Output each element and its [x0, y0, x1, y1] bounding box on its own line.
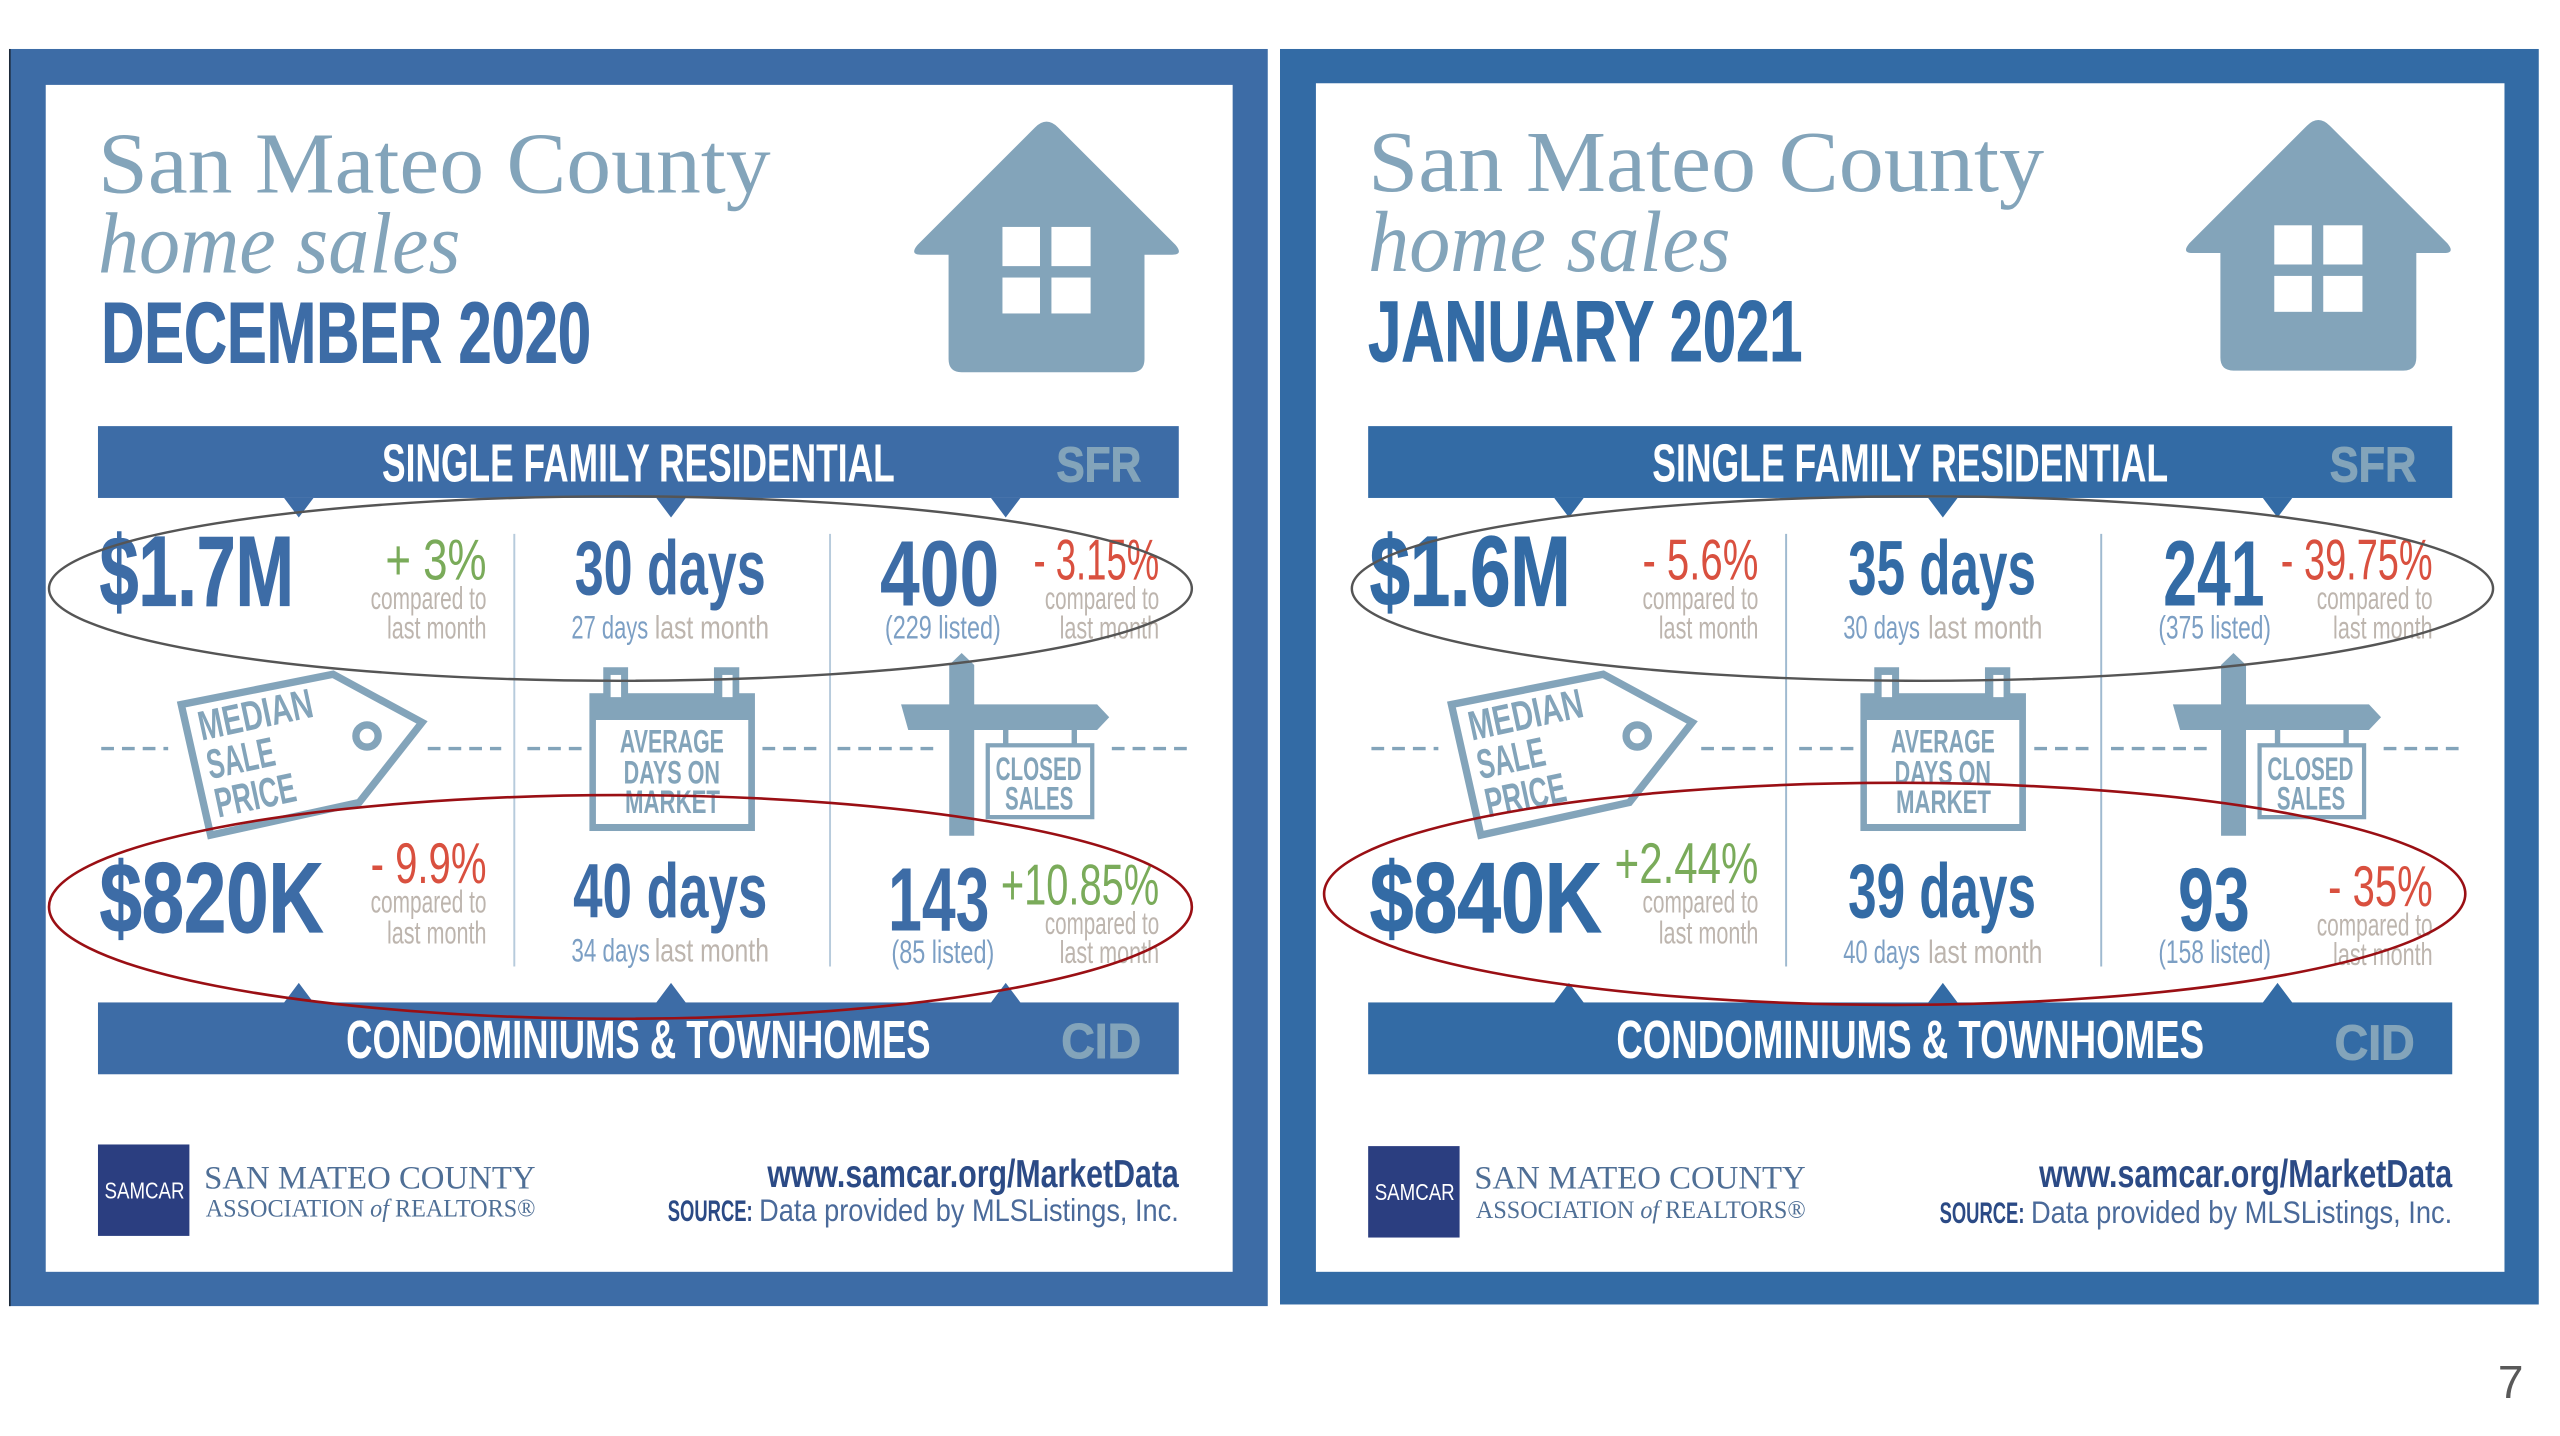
SFR median price: $1.6M — [1370, 517, 1571, 628]
icon: calendar — [589, 667, 755, 831]
SFR closed sales: (229 listed) — [885, 608, 1001, 645]
source and website: www.samcar.org/MarketData — [2038, 1153, 2453, 1196]
CID median price: $820K — [100, 843, 323, 954]
icon: price tag: SALE — [1472, 728, 1549, 788]
banner: single family residential: SINGLE FAMILY RESIDENTIAL — [382, 434, 895, 494]
icon: calendar: AVERAGE — [620, 723, 724, 760]
ellipse highlight: CID row — [1324, 783, 2465, 1005]
SFR median price: last month — [1659, 610, 1758, 645]
SAMCAR logo — [1368, 1146, 1806, 1238]
SFR days on market: last month — [1928, 608, 2042, 645]
inner white card — [1316, 83, 2504, 1272]
panel: December 2020 — [9, 49, 1268, 1306]
SFR median price: + 3% — [385, 529, 487, 593]
CID median price: +2.44% — [1615, 832, 1758, 896]
ellipse highlight: CID row — [49, 795, 1192, 1019]
inner white card — [46, 85, 1233, 1272]
CID days on market: last month — [1928, 933, 2042, 970]
icon: calendar: AVERAGE — [1891, 723, 1995, 760]
SFR closed sales: compared to — [2317, 581, 2433, 616]
title: San Mateo County — [98, 116, 771, 212]
title — [98, 116, 771, 381]
icon: price tag: PRICE — [1481, 763, 1570, 826]
CID median price: last month — [1659, 916, 1758, 951]
icon: for sale sign — [2173, 653, 2381, 836]
banner: condominiums and townhomes: CID — [2335, 1017, 2415, 1071]
outer blue frame — [9, 49, 1268, 1306]
title: DECEMBER 2020 — [101, 285, 591, 381]
SFR days on market: 35 days — [1848, 526, 2036, 611]
SFR days on market: 30 days — [575, 526, 766, 611]
CID closed sales: - 35% — [2328, 855, 2433, 919]
icon: for sale sign: SALES — [1005, 779, 1073, 816]
page number: 7 — [2498, 1356, 2524, 1408]
SFR closed sales: 400 — [880, 522, 999, 626]
SFR closed sales: 241 — [2163, 522, 2264, 626]
SFR closed sales: - 39.75% — [2281, 529, 2433, 593]
SAMCAR logo: SAMCAR — [105, 1177, 185, 1203]
SFR median price: last month — [387, 610, 487, 645]
banner: condominiums and townhomes — [1368, 983, 2452, 1074]
icon: calendar: DAYS ON — [1895, 753, 1991, 790]
title: home sales — [1368, 194, 1731, 290]
CID days on market: 39 days — [1848, 850, 2036, 935]
CID closed sales: compared to — [1045, 906, 1159, 941]
CID closed sales — [2158, 851, 2433, 972]
SFR days on market: 27 days — [571, 608, 648, 645]
CID closed sales: 143 — [888, 851, 989, 951]
panel: January 2021 — [1280, 49, 2539, 1304]
CID median price — [1370, 832, 1758, 954]
CID closed sales: +10.85% — [1001, 853, 1159, 917]
icon: price tag: MEDIAN — [1464, 679, 1587, 749]
banner: single family residential: SINGLE FAMILY RESIDENTIAL — [1652, 434, 2168, 494]
CID median price — [100, 832, 487, 954]
CID median price: last month — [387, 916, 487, 951]
source and website: SOURCE: — [668, 1195, 753, 1228]
CID days on market: 40 days — [1843, 933, 1920, 970]
banner: single family residential: SFR — [2330, 439, 2416, 493]
CID median price: $840K — [1370, 843, 1602, 954]
SFR median price: compared to — [1642, 581, 1758, 616]
title: home sales — [98, 196, 460, 292]
icon: calendar: DAYS ON — [624, 753, 720, 790]
icon: price tag: PRICE — [210, 763, 300, 826]
SAMCAR logo: SAN MATEO COUNTY — [204, 1161, 536, 1197]
CID closed sales: last month — [1060, 935, 1159, 970]
title: San Mateo County — [1368, 114, 2044, 210]
SFR closed sales: - 3.15% — [1033, 529, 1159, 593]
banner: condominiums and townhomes: CID — [1061, 1015, 1141, 1069]
CID median price: compared to — [371, 885, 487, 920]
banner: condominiums and townhomes — [98, 983, 1179, 1074]
icon: for sale sign: CLOSED — [996, 750, 1082, 787]
CID days on market: 34 days — [571, 932, 650, 969]
CID days on market — [571, 850, 769, 969]
icon: for sale sign — [901, 653, 1109, 836]
source and website: Data provided by MLSListings, Inc. — [2031, 1195, 2452, 1230]
SFR median price — [1370, 517, 1758, 645]
icon: calendar: MARKET — [625, 783, 720, 820]
icon: price tag — [1451, 674, 1692, 835]
SFR median price: compared to — [371, 581, 487, 616]
SFR closed sales: last month — [1060, 610, 1159, 645]
CID closed sales: compared to — [2317, 907, 2433, 942]
ellipse highlight: SFR row — [1352, 496, 2493, 681]
SFR days on market: 30 days — [1843, 608, 1920, 645]
banner: condominiums and townhomes: CONDOMINIUMS & TOWNHOMES — [1616, 1010, 2204, 1070]
source and website: SOURCE: — [1940, 1197, 2024, 1230]
banner: single family residential — [1368, 426, 2452, 518]
SFR median price — [100, 517, 487, 645]
source and website: www.samcar.org/MarketData — [767, 1153, 1180, 1196]
title — [1368, 114, 2044, 380]
SFR median price: $1.7M — [100, 517, 294, 628]
SFR days on market — [1843, 526, 2042, 645]
icon: for sale sign: SALES — [2277, 779, 2345, 816]
source and website: Data provided by MLSListings, Inc. — [759, 1193, 1179, 1228]
CID days on market: last month — [655, 932, 769, 969]
icon: price tag — [181, 674, 422, 835]
source and website — [668, 1153, 1180, 1228]
CID days on market: 40 days — [573, 850, 767, 935]
SFR closed sales — [880, 522, 1159, 645]
SFR days on market — [571, 526, 769, 645]
SAMCAR logo: SAN MATEO COUNTY — [1474, 1161, 1806, 1197]
SFR closed sales: compared to — [1045, 581, 1159, 616]
source and website — [1940, 1153, 2453, 1230]
outer blue frame — [1280, 49, 2539, 1304]
icon: price tag: MEDIAN — [194, 679, 317, 749]
icon: calendar — [1860, 667, 2026, 831]
title: JANUARY 2021 — [1368, 284, 1802, 380]
SFR closed sales: (375 listed) — [2158, 608, 2271, 645]
SAMCAR logo: SAMCAR — [1375, 1179, 1455, 1205]
CID median price: compared to — [1642, 885, 1758, 920]
banner: condominiums and townhomes: CONDOMINIUMS & TOWNHOMES — [346, 1010, 931, 1070]
icon: house — [2186, 120, 2451, 371]
CID closed sales: (158 listed) — [2158, 933, 2271, 970]
SAMCAR logo — [98, 1144, 536, 1236]
SFR median price: - 5.6% — [1642, 529, 1758, 593]
CID closed sales: 93 — [2178, 851, 2250, 951]
icon: for sale sign: CLOSED — [2267, 750, 2353, 787]
SFR closed sales — [2158, 522, 2433, 645]
icon: calendar: MARKET — [1896, 783, 1991, 820]
banner: single family residential — [98, 426, 1179, 518]
CID closed sales: (85 listed) — [891, 933, 994, 970]
CID closed sales — [888, 851, 1159, 970]
SAMCAR logo: ASSOCIATION of REALTORS® — [1476, 1196, 1806, 1224]
CID closed sales: last month — [2333, 937, 2433, 972]
SFR closed sales: last month — [2333, 610, 2433, 645]
ellipse highlight: SFR row — [49, 496, 1192, 681]
CID days on market — [1843, 850, 2042, 970]
icon: house — [914, 122, 1179, 372]
SAMCAR logo: ASSOCIATION of REALTORS® — [206, 1194, 536, 1222]
icon: price tag: SALE — [202, 728, 279, 788]
banner: single family residential: SFR — [1056, 439, 1141, 493]
CID median price: - 9.9% — [371, 832, 487, 896]
SFR days on market: last month — [655, 608, 769, 645]
